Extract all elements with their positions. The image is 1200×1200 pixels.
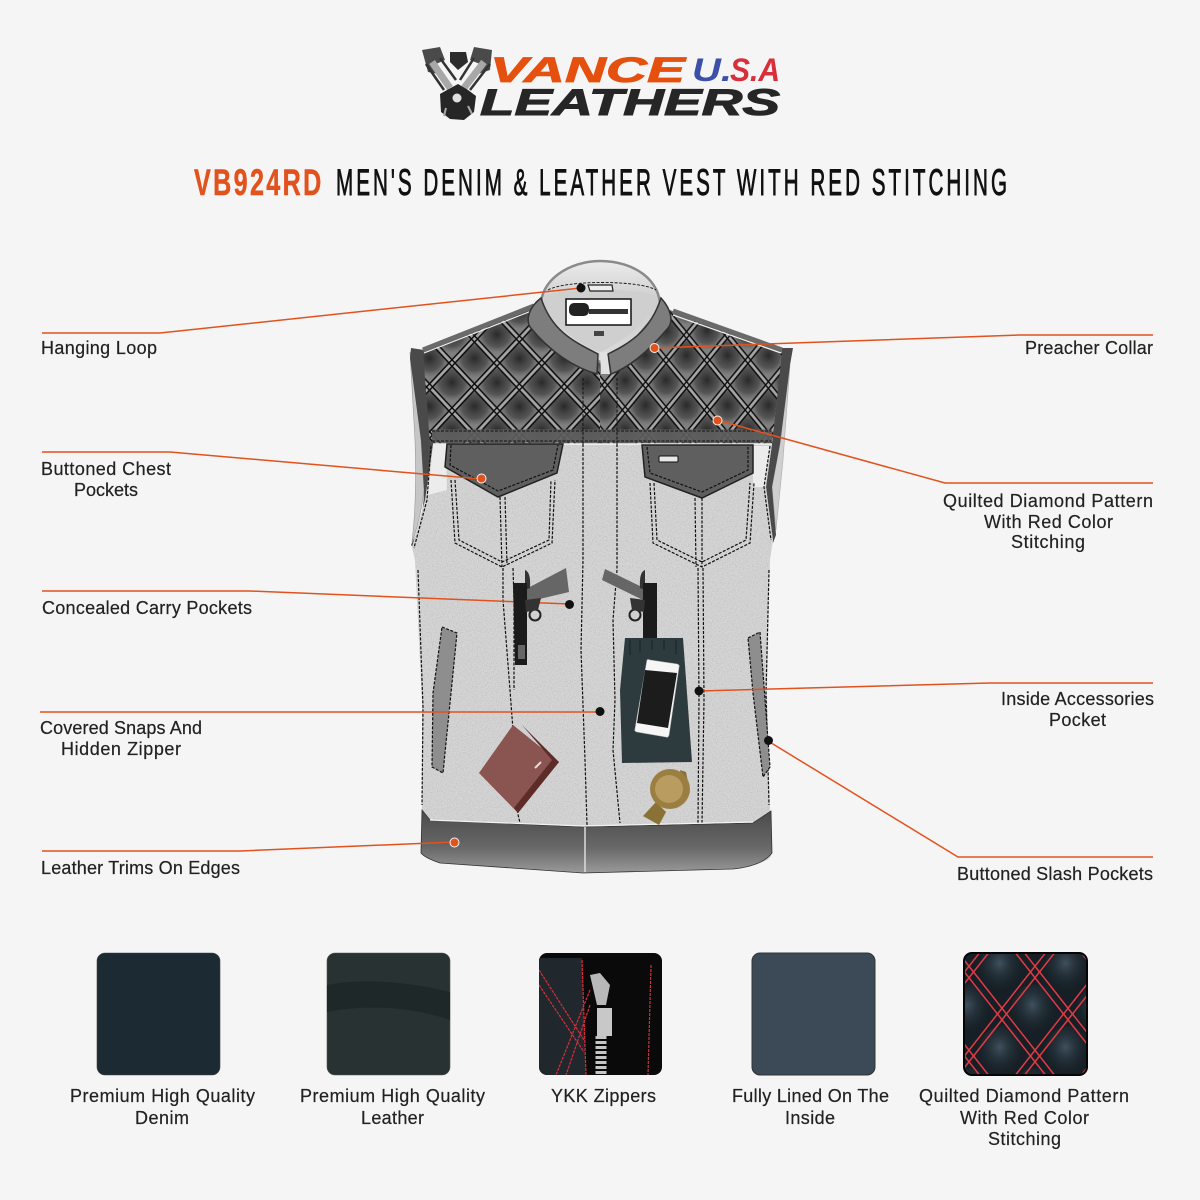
caption: denim: Denim (135, 1108, 189, 1128)
label: inside accessories pocket: Pocket (1049, 710, 1106, 730)
label: preacher collar: Preacher Collar (1025, 338, 1153, 358)
label: quilted diamond pattern (943, 491, 1153, 552)
dot: leather trims (450, 838, 459, 847)
leader lines (40, 288, 1153, 857)
hanging loop (588, 285, 613, 291)
swatch: leather (300, 953, 485, 1128)
collar back (541, 261, 660, 362)
swatch: denim (70, 953, 255, 1128)
line: hanging loop (42, 288, 581, 333)
caption: leather: Premium High Quality (300, 1086, 485, 1106)
placket stitching (503, 444, 704, 825)
caption: denim (70, 1086, 255, 1128)
swatch: zipper (539, 953, 662, 1106)
title (194, 161, 1007, 204)
dot: chest pockets (477, 474, 486, 483)
dot: hanging loop (576, 284, 586, 292)
icon: engine (422, 47, 492, 120)
caption: quilted diamond: Quilted Diamond Pattern (919, 1086, 1129, 1106)
caption: fully lined: Inside (785, 1108, 835, 1128)
icon: wallet (479, 725, 559, 813)
label: covered snaps: Covered Snaps And (40, 718, 202, 738)
armhole lining right (772, 365, 790, 530)
neck label (566, 299, 631, 336)
callout labels (40, 338, 1154, 884)
label: quilted diamond pattern: With Red Color (984, 512, 1113, 532)
line: covered snaps (40, 711, 600, 713)
swatch: lining (732, 953, 889, 1128)
armhole band left (410, 348, 433, 550)
caption: quilted diamond: With Red Color (960, 1108, 1089, 1128)
dot: inside accessories (694, 686, 704, 696)
icon: watch (643, 769, 690, 825)
line: concealed carry (42, 591, 569, 604)
label: covered snaps (40, 718, 202, 759)
right slash pocket (748, 632, 770, 777)
caption: fully lined (732, 1086, 889, 1128)
collar fold (548, 282, 656, 290)
caption: quilted diamond (919, 1086, 1129, 1149)
dot: covered snaps (596, 707, 604, 716)
light side panels (428, 445, 770, 495)
caption: denim: Premium High Quality (70, 1086, 255, 1106)
collar band left (528, 298, 598, 374)
caption: fully lined: Fully Lined On The (732, 1086, 889, 1106)
label: quilted diamond pattern: Stitching (1011, 532, 1085, 552)
label: quilted diamond pattern: Quilted Diamond Pattern (943, 491, 1153, 511)
quilted yoke (423, 303, 782, 444)
logo wordmark: Leathers: LEATHERS (480, 82, 780, 123)
collar band right (608, 298, 671, 374)
caption: quilted diamond: Stitching (988, 1129, 1061, 1149)
icon: left pistol (513, 568, 569, 665)
line: chest pockets (42, 452, 481, 479)
line: quilted diamond (717, 420, 1153, 483)
accessories (479, 568, 692, 825)
icon: phone (635, 660, 679, 737)
label: inside accessories pocket: Inside Accessories (1001, 689, 1154, 709)
label: buttoned chest pockets: Pockets (74, 480, 138, 500)
dot: preacher collar (650, 344, 659, 352)
title code: VB924RD (194, 161, 321, 203)
line: leather trims (42, 842, 454, 851)
label: covered snaps: Hidden Zipper (61, 739, 181, 759)
swatch: quilted (919, 953, 1129, 1149)
label: slash pockets: Buttoned Slash Pockets (957, 864, 1153, 884)
dot: concealed carry (565, 600, 574, 609)
left slash pocket (432, 627, 457, 773)
caption: ykk zippers: YKK Zippers (551, 1086, 656, 1106)
side stitching (414, 446, 771, 805)
collar (528, 261, 671, 374)
logo wordmark: USA: S.A (730, 52, 780, 88)
icon: pouch (620, 638, 692, 763)
label: inside accessories pocket (1001, 689, 1154, 730)
label: buttoned chest pockets (41, 459, 171, 500)
line: slash pockets (768, 741, 1153, 857)
label: leather trims: Leather Trims On Edges (41, 858, 240, 878)
leather hem trim (421, 810, 772, 873)
chest pocket tab (659, 456, 678, 462)
logo (422, 47, 780, 123)
line: preacher collar (654, 335, 1153, 348)
caption: leather: Leather (361, 1108, 424, 1128)
caption: leather (300, 1086, 485, 1128)
neck lining (545, 290, 656, 352)
title text: MEN'S DENIM & LEATHER VEST WITH RED STITCHING (336, 163, 1007, 204)
dot: quilted diamond (713, 416, 722, 425)
label: buttoned chest pockets: Buttoned Chest (41, 459, 171, 479)
body grain (410, 444, 776, 874)
label: hanging loop: Hanging Loop (41, 338, 157, 358)
line: inside accessories (699, 683, 1153, 691)
callout dots (450, 284, 773, 847)
left chest pocket (445, 444, 563, 567)
logo wordmark: USA: U. (692, 52, 732, 88)
icon: right pistol (602, 569, 657, 640)
logo wordmark: USA (692, 52, 780, 88)
armhole lining left (410, 352, 424, 542)
right chest pocket (642, 445, 754, 567)
vest body (412, 444, 773, 872)
armhole band right (766, 348, 793, 543)
dot: slash pockets (764, 736, 773, 745)
label: concealed carry pockets: Concealed Carry Pockets (42, 598, 252, 618)
vest (410, 261, 793, 874)
logo wordmark: Vance: VANCE (490, 51, 688, 90)
